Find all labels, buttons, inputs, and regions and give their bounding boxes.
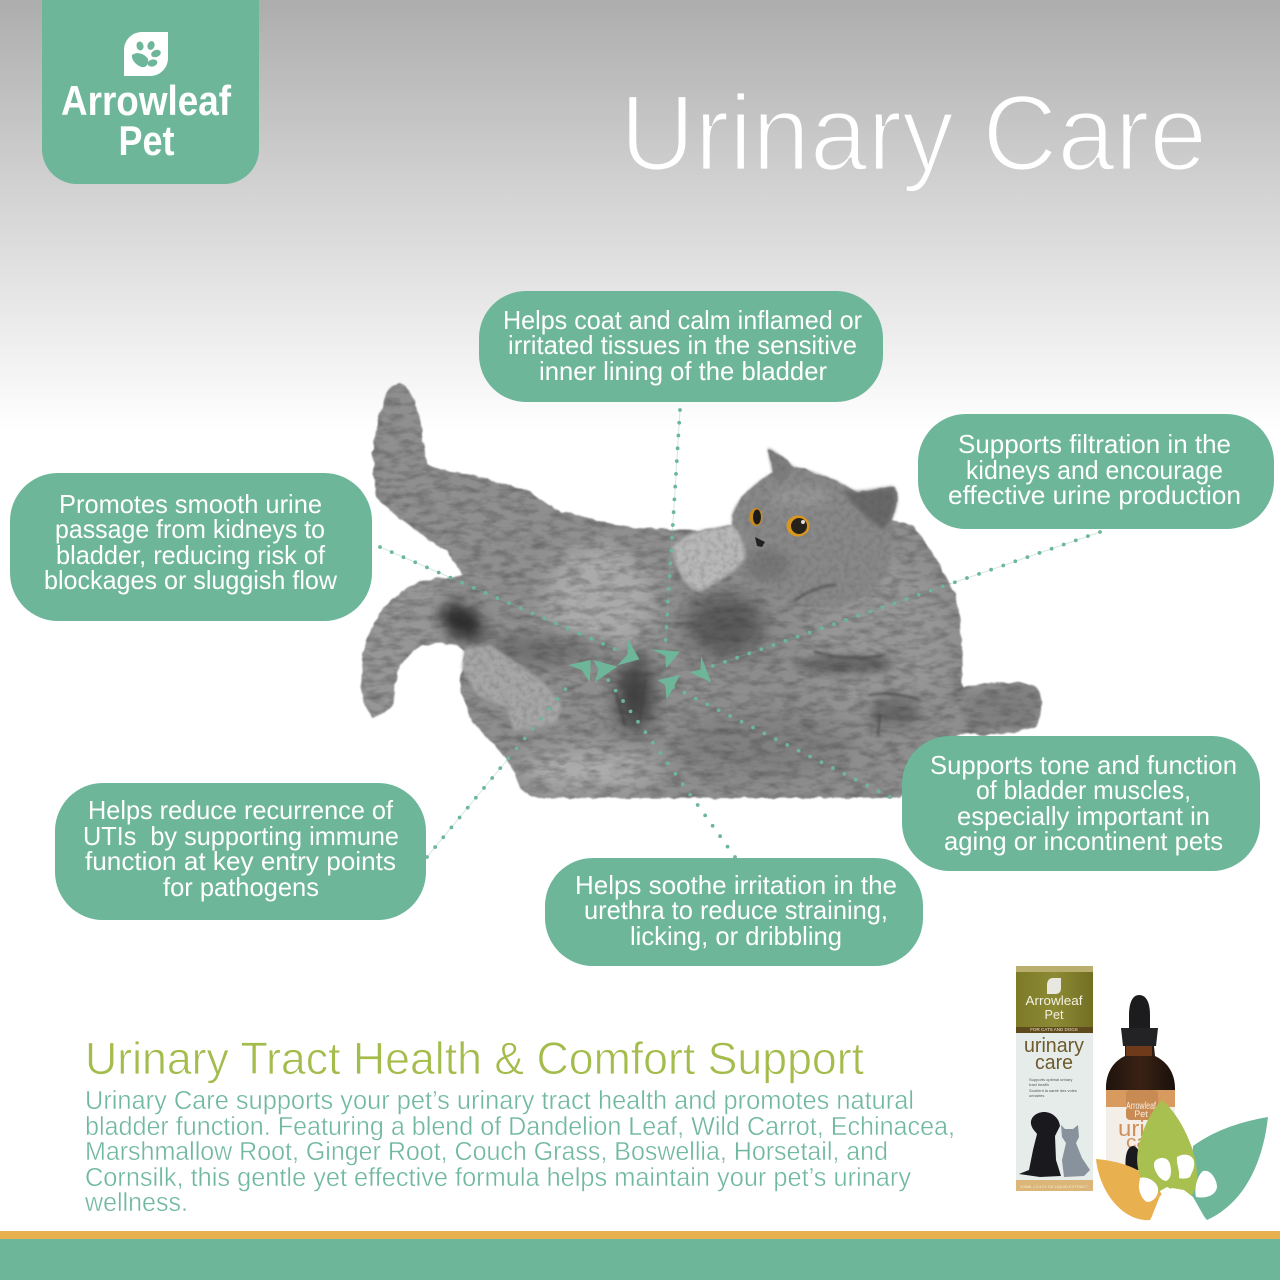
- chest tone: [829, 613, 926, 658]
- underside shadow: [617, 657, 653, 733]
- product box: Pet: [1044, 1007, 1064, 1022]
- belly highlight: [545, 545, 655, 655]
- tail base shadow: [434, 597, 490, 647]
- callout: bladder muscles: [902, 736, 1260, 871]
- callout: kidneys: [918, 414, 1274, 529]
- description paragraph: [84, 1087, 955, 1217]
- title: Urinary Care: [620, 72, 1207, 193]
- product bottle: Pet: [1134, 1109, 1148, 1119]
- cat front paw: [672, 525, 745, 591]
- product box: Supports optimal urinary: [1029, 1077, 1072, 1082]
- callout: recurrence of UTIs: function at key entry points: [85, 846, 396, 876]
- callout: urethra: licking, or dribbling: [630, 921, 842, 951]
- callout: bladder muscles: aging or incontinent pets: [944, 826, 1223, 856]
- callout: bladder muscles: especially important in: [957, 801, 1210, 831]
- icon: three leaves with paw pads: [1096, 1100, 1268, 1224]
- callout: recurrence of UTIs: [55, 783, 426, 920]
- cat eyes and nose: [750, 508, 810, 547]
- icon: leaf with paw: [124, 32, 168, 76]
- raised leg tone: [385, 390, 580, 620]
- product box: 100ML | 3.4 FL OZ LIQUID EXTRACT: [1020, 1184, 1088, 1189]
- callout: recurrence of UTIs: Helps reduce recurrence of: [88, 795, 394, 825]
- section heading: Urinary Tract Health & Comfort Support: [85, 1033, 864, 1084]
- icon: grey cat: [1061, 1125, 1090, 1177]
- callout: recurrence of UTIs: for pathogens: [163, 872, 319, 902]
- product box: urinary: [1024, 1035, 1084, 1057]
- lower body light: [520, 750, 660, 790]
- product box: urinaires: [1029, 1093, 1044, 1098]
- product bottle: Arrowleaf: [1126, 1101, 1156, 1112]
- callout: urine passage: passage from kidneys to: [55, 514, 325, 544]
- callout: bladder muscles: Supports tone and function: [930, 750, 1237, 780]
- tail: [367, 585, 440, 704]
- description paragraph: Marshmallow Root, Ginger Root, Couch Grass, Boswellia, Horsetail, and: [85, 1138, 888, 1166]
- product box: Soutient la santé des voies: [1029, 1088, 1077, 1093]
- logo panel: Pet: [118, 117, 175, 164]
- callout: kidneys: kidneys and encourage: [966, 455, 1223, 485]
- product bottle: [1106, 995, 1175, 1176]
- callout: bladder lining: [479, 291, 883, 402]
- cat fur strokes: [615, 585, 920, 735]
- callout: recurrence of UTIs: UTIs by supporting immune: [83, 821, 399, 851]
- callout: urine passage: bladder, reducing risk of: [56, 540, 326, 570]
- product bottle: urin: [1118, 1116, 1158, 1141]
- dotted connector lines: [380, 410, 1100, 857]
- footer bars: [0, 1231, 1280, 1280]
- product box: care: [1035, 1052, 1073, 1074]
- product box: tract health: [1029, 1082, 1049, 1087]
- callout: bladder lining: irritated tissues in the sensitive: [508, 330, 857, 360]
- callout: urine passage: blockages or sluggish flow: [44, 565, 337, 595]
- description paragraph: Cornsilk, this gentle yet effective formula helps maintain your pet’s urinary: [85, 1164, 911, 1192]
- callout: urine passage: [10, 473, 372, 621]
- right paw: [966, 684, 1040, 726]
- product box: [1016, 966, 1093, 1191]
- callout: urethra: urethra to reduce straining,: [584, 895, 888, 925]
- orange leaf: [1096, 1159, 1163, 1220]
- callout: bladder lining: inner lining of the bladder: [539, 356, 827, 386]
- callout: urine passage: Promotes smooth urine: [59, 489, 322, 519]
- logo panel: [42, 0, 259, 184]
- callout: urethra: Helps soothe irritation in the: [575, 870, 897, 900]
- description paragraph: bladder function. Featuring a blend of Dandelion Leaf, Wild Carrot, Echinacea,: [85, 1113, 955, 1141]
- product box: Arrowleaf: [1026, 993, 1083, 1008]
- description paragraph: wellness.: [84, 1189, 188, 1217]
- logo wordmark: Arrowleaf: [61, 77, 232, 124]
- callout: bladder lining: Helps coat and calm inflamed or: [503, 305, 862, 335]
- cat back paw: [462, 645, 562, 730]
- teal leaf: [1190, 1117, 1268, 1220]
- cat head: [732, 448, 897, 608]
- callout: bladder muscles: of bladder muscles,: [976, 775, 1191, 805]
- paw pads: [1139, 1155, 1217, 1224]
- product box: FOR CATS AND DOGS: [1030, 1027, 1078, 1032]
- icon: puppy: [1019, 1112, 1061, 1177]
- callout: kidneys: Supports filtration in the: [958, 429, 1231, 459]
- description paragraph: Urinary Care supports your pet’s urinary tract health and promotes natural: [85, 1087, 914, 1115]
- green leaf: [1137, 1100, 1197, 1198]
- arrowheads converging on bladder: [568, 639, 711, 700]
- product bottle: ca: [1126, 1132, 1149, 1152]
- callout: kidneys: effective urine production: [948, 480, 1241, 510]
- callout: urethra: [545, 858, 923, 966]
- cat photo illustration: [350, 375, 1050, 805]
